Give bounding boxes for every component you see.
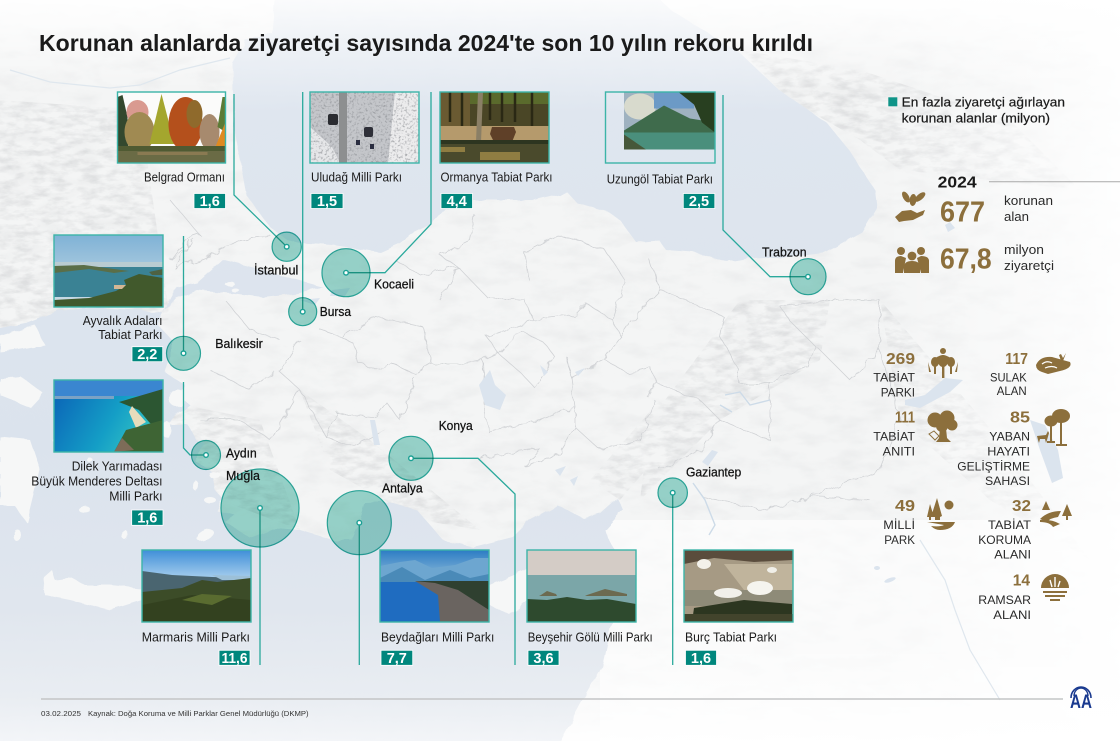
stat: 85 Yaban Hayatı Geliştirme Sahası: GELİŞTİRME [957, 460, 1030, 474]
stat: 111 Tabiat Anıtı: ANITI [883, 445, 915, 459]
logo: AA: AA [1070, 692, 1092, 713]
connector lines [184, 92, 808, 665]
stat: 32 Tabiat Koruma Alanı: TABİAT [988, 518, 1032, 532]
stat: 32 Tabiat Koruma Alanı [978, 498, 1072, 561]
city labels: Gaziantep [686, 466, 741, 480]
stat: 85 Yaban Hayatı Geliştirme Sahası: HAYATI [987, 445, 1030, 459]
stat: 111 Tabiat Anıtı [873, 409, 958, 459]
value badge: 3,6 [533, 651, 554, 667]
islands [0, 282, 540, 615]
icon: national park [927, 498, 955, 530]
year heading: 2024 [938, 175, 977, 192]
panel: 2024 totals [895, 175, 1120, 275]
label: Ormanya Tabiat Parkı [440, 171, 552, 185]
circle: Konya [389, 436, 433, 480]
circle: Muğla [221, 469, 299, 547]
circle: İstanbul [272, 232, 301, 261]
label: Belgrad Ormanı [144, 171, 225, 185]
icon: ramsar [1041, 574, 1069, 601]
stat: 14 Ramsar Alanı: ALANI [993, 608, 1031, 622]
value badge: 1,6 [137, 511, 157, 527]
city labels: İstanbul [254, 263, 298, 277]
label: Tabiat Parkı [98, 328, 162, 342]
stat: 49 Milli Park: PARK [884, 533, 915, 547]
legend: korunan alanlar (milyon) [902, 112, 1050, 126]
stat: 85 Yaban Hayatı Geliştirme Sahası [957, 409, 1070, 488]
value badge: 1,6 [200, 194, 220, 210]
value badge: 7,7 [387, 651, 407, 667]
stat: 32 Tabiat Koruma Alanı: KORUMA [978, 533, 1031, 547]
label: Burç Tabiat Parkı [685, 631, 777, 645]
stat: 67,8 milyon ziyaretçi: ziyaretçi [1004, 259, 1054, 273]
city labels: Kocaeli [374, 277, 414, 291]
icon: hand with leaves [895, 190, 927, 222]
stat: 111 Tabiat Anıtı: TABİAT [873, 430, 916, 444]
stat: 117 Sulak Alan: 117 [1005, 351, 1028, 368]
stat: 14 Ramsar Alanı [978, 573, 1069, 622]
icon: wetland [1036, 353, 1071, 374]
panel: Ormanya Tabiat Parkı [440, 92, 552, 210]
stat: 85 Yaban Hayatı Geliştirme Sahası: 85 [1010, 409, 1030, 426]
city labels: Aydın [226, 446, 257, 460]
label: Beyşehir Gölü Milli Parkı [528, 631, 653, 645]
stat: 269 Tabiat Parkı: TABİAT [873, 371, 916, 385]
city labels: Muğla [226, 469, 260, 483]
circle: Kocaeli [322, 249, 370, 297]
title: Korunan alanlarda ziyaretçi sayısında 2024'te son 10 yılın rekoru kırıldı [39, 30, 813, 56]
stat: 32 Tabiat Koruma Alanı: 32 [1012, 498, 1031, 515]
source note: 03.02.2025 [41, 711, 81, 718]
stat: 111 Tabiat Anıtı: 111 [895, 409, 915, 426]
icon: park [928, 348, 958, 378]
source note: Kaynak: Doğa Koruma ve Milli Parklar Genel Müdürlüğü (DKMP) [88, 711, 309, 718]
stat: 67,8 milyon ziyaretçi: milyon [1004, 243, 1044, 257]
label: Dilek Yarımadası [72, 460, 162, 474]
panel: Burç Tabiat Parkı [684, 550, 793, 667]
label: Uludağ Milli Parkı [311, 171, 402, 185]
circle: Trabzon [790, 259, 826, 295]
stat: 677 korunan alan [940, 194, 1053, 229]
stat: 117 Sulak Alan [990, 351, 1071, 398]
city labels [215, 246, 807, 495]
value badge: 1,5 [317, 194, 337, 210]
stat: 14 Ramsar Alanı: 14 [1013, 573, 1030, 590]
panel: Dilek Yarımadası [31, 380, 163, 527]
label: Ayvalık Adaları [83, 314, 162, 328]
city labels: Konya [439, 419, 473, 433]
sea of marmara [163, 260, 323, 313]
logo: AA [1070, 687, 1092, 713]
sea areas [0, 0, 877, 741]
icon: trees and deer [1037, 409, 1070, 446]
stat: 677 korunan alan: alan [1004, 210, 1029, 224]
panel: Beyşehir Gölü Milli Parkı [527, 550, 653, 667]
stat: 67,8 milyon ziyaretçi: 67,8 [940, 243, 992, 275]
stat: 117 Sulak Alan: SULAK [990, 371, 1027, 385]
city labels: Balıkesir [215, 337, 263, 351]
label: Milli Parkı [109, 489, 162, 503]
panel: Belgrad Ormanı [118, 92, 226, 210]
panel: Marmaris Milli Parkı [142, 550, 251, 667]
stat: 269 Tabiat Parkı: 269 [886, 351, 915, 368]
circle: Gaziantep [658, 478, 687, 507]
value badge: 1,6 [691, 651, 711, 667]
panel: Ayvalık Adaları Tabiat Parkı [54, 235, 163, 363]
icon: people [895, 247, 929, 273]
lakes and rivers [300, 222, 1063, 584]
stat: 677 korunan alan: 677 [940, 197, 985, 229]
stat: 85 Yaban Hayatı Geliştirme Sahası: YABAN [989, 430, 1030, 444]
value badge [132, 510, 163, 527]
stat: 67,8 milyon ziyaretçi [940, 243, 1054, 275]
stat: 32 Tabiat Koruma Alanı: ALANI [994, 547, 1031, 561]
icon: nature reserve [1040, 501, 1072, 527]
value badge: 11,6 [222, 651, 248, 667]
label: Marmaris Milli Parkı [142, 631, 250, 645]
city labels: Bursa [320, 305, 351, 319]
city labels: Antalya [382, 481, 423, 495]
panel: Uzungöl Tabiat Parkı [606, 92, 715, 210]
stat: 269 Tabiat Parkı [873, 348, 958, 400]
stat: 269 Tabiat Parkı: PARKI [881, 386, 915, 400]
panel: Uludağ Milli Parkı [310, 92, 419, 210]
panel: Beydağları Milli Parkı [380, 550, 494, 667]
footer line [41, 698, 1063, 700]
legend: En fazla ziyaretçi ağırlayan [902, 96, 1065, 110]
value badge: 2,2 [137, 347, 157, 363]
circle: Aydın [192, 440, 220, 470]
stat: 49 Milli Park: MİLLİ [883, 518, 915, 532]
aegean and mediterranean [0, 308, 623, 741]
label: Uzungöl Tabiat Parkı [607, 172, 713, 186]
circle: Balıkesir [166, 336, 200, 370]
circle: Antalya [327, 491, 391, 555]
label [83, 314, 162, 342]
stat: 117 Sulak Alan: ALAN [997, 384, 1027, 398]
stat: 49 Milli Park [883, 498, 955, 547]
label [31, 460, 162, 503]
black sea [233, 0, 877, 262]
icon: monument tree [928, 410, 958, 442]
stat: 14 Ramsar Alanı: RAMSAR [978, 593, 1031, 607]
city labels: Trabzon [762, 246, 807, 260]
stat: 85 Yaban Hayatı Geliştirme Sahası: SAHASI [985, 474, 1030, 488]
legend [888, 96, 1065, 126]
value badge: 4,4 [447, 194, 467, 210]
label: Beydağları Milli Parkı [381, 631, 494, 645]
label: Büyük Menderes Deltası [31, 475, 162, 489]
circle: Bursa [289, 298, 317, 326]
stat: 49 Milli Park: 49 [895, 498, 915, 515]
value badge: 2,5 [689, 194, 709, 210]
stat: 677 korunan alan: korunan [1004, 194, 1053, 208]
